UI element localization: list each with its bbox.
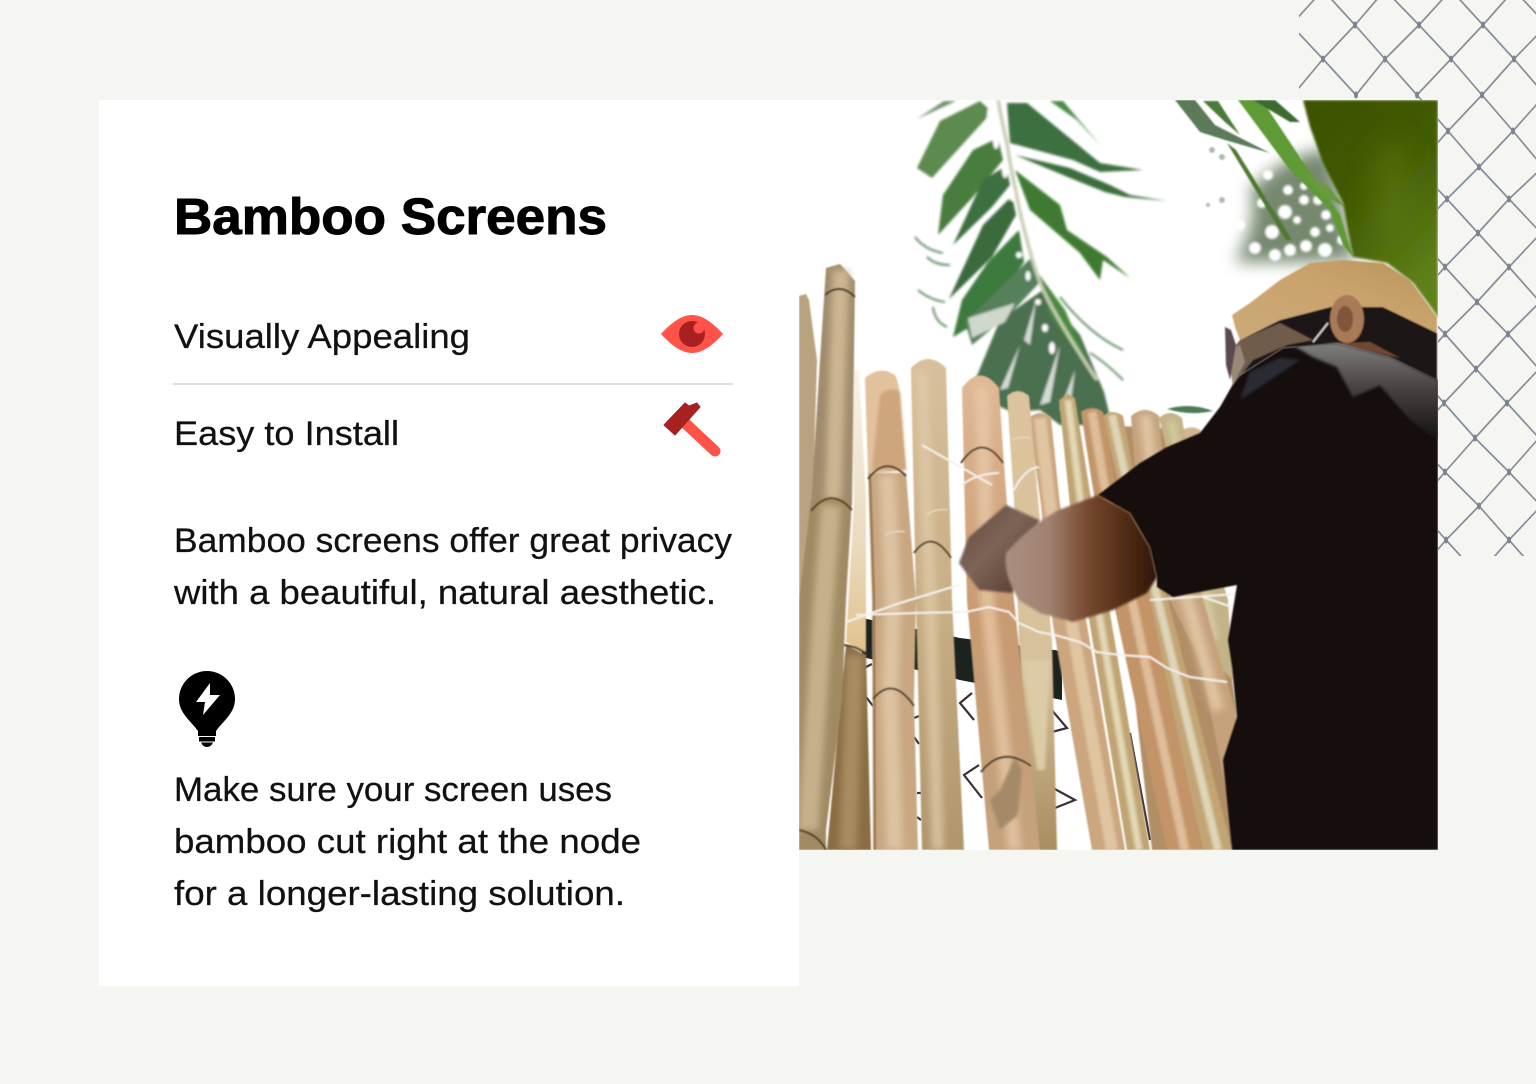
pole D bbox=[865, 371, 918, 850]
tip text bbox=[174, 771, 641, 913]
description text: with a beautiful, natural aesthetic. bbox=[173, 574, 716, 612]
tip text: Make sure your screen uses bbox=[174, 771, 612, 809]
pole A bbox=[799, 294, 817, 600]
small leaf by shoulder bbox=[1167, 406, 1213, 413]
description text bbox=[173, 522, 732, 612]
pole H bbox=[1029, 413, 1125, 850]
faint nodes bbox=[885, 437, 1030, 535]
forearm and hand bbox=[959, 495, 1157, 622]
bamboo nodes bbox=[799, 289, 1031, 850]
pole L bbox=[1131, 410, 1237, 790]
pole C lower bbox=[827, 645, 871, 850]
ear bbox=[1330, 295, 1364, 343]
pole B upper bbox=[811, 264, 855, 505]
pole J bbox=[1081, 408, 1202, 850]
benefit row: visually appealing: Visually Appealing bbox=[174, 318, 470, 356]
man's head and cap bbox=[1225, 260, 1437, 385]
bamboo poles bbox=[799, 264, 1237, 850]
pole B lower bbox=[799, 500, 852, 850]
black beam and chain wire behind bamboo bbox=[862, 618, 1150, 840]
title: Bamboo Screens bbox=[174, 188, 607, 245]
backing of rear poles bbox=[1100, 425, 1237, 850]
blurred foliage bbox=[1206, 147, 1355, 262]
pole F bbox=[962, 376, 1040, 850]
benefit row: easy to install bbox=[174, 403, 715, 453]
chain-link fence pattern bbox=[1291, 0, 1536, 575]
icon: eye bbox=[661, 315, 723, 353]
divider bbox=[173, 383, 733, 385]
sky bbox=[799, 100, 1438, 850]
twine bbox=[846, 445, 1237, 682]
tip text: for a longer-lasting solution. bbox=[174, 875, 625, 913]
pole C upper bbox=[846, 370, 866, 652]
pole K bbox=[1103, 412, 1232, 850]
benefit row: easy to install: Easy to Install bbox=[174, 415, 399, 453]
description text: Bamboo screens offer great privacy bbox=[174, 522, 732, 560]
upper right palm leaves bbox=[1175, 100, 1353, 257]
pole M bbox=[1159, 413, 1233, 680]
icon: lightbulb tip bbox=[179, 671, 235, 747]
photo: man tying bamboo screen bbox=[799, 100, 1438, 850]
pole G bbox=[1007, 391, 1057, 850]
tip text: bamboo cut right at the node bbox=[174, 823, 641, 861]
pole N bbox=[1184, 426, 1202, 440]
icon: hammer bbox=[664, 403, 715, 451]
pole I bbox=[1059, 394, 1150, 850]
pole E bbox=[911, 359, 964, 850]
man's shirt bbox=[1098, 343, 1438, 850]
large out-of-focus leaf bbox=[1303, 100, 1438, 318]
palm frond bbox=[915, 100, 1167, 425]
panel: text card bbox=[99, 100, 799, 986]
benefit row: visually appealing bbox=[174, 315, 723, 356]
